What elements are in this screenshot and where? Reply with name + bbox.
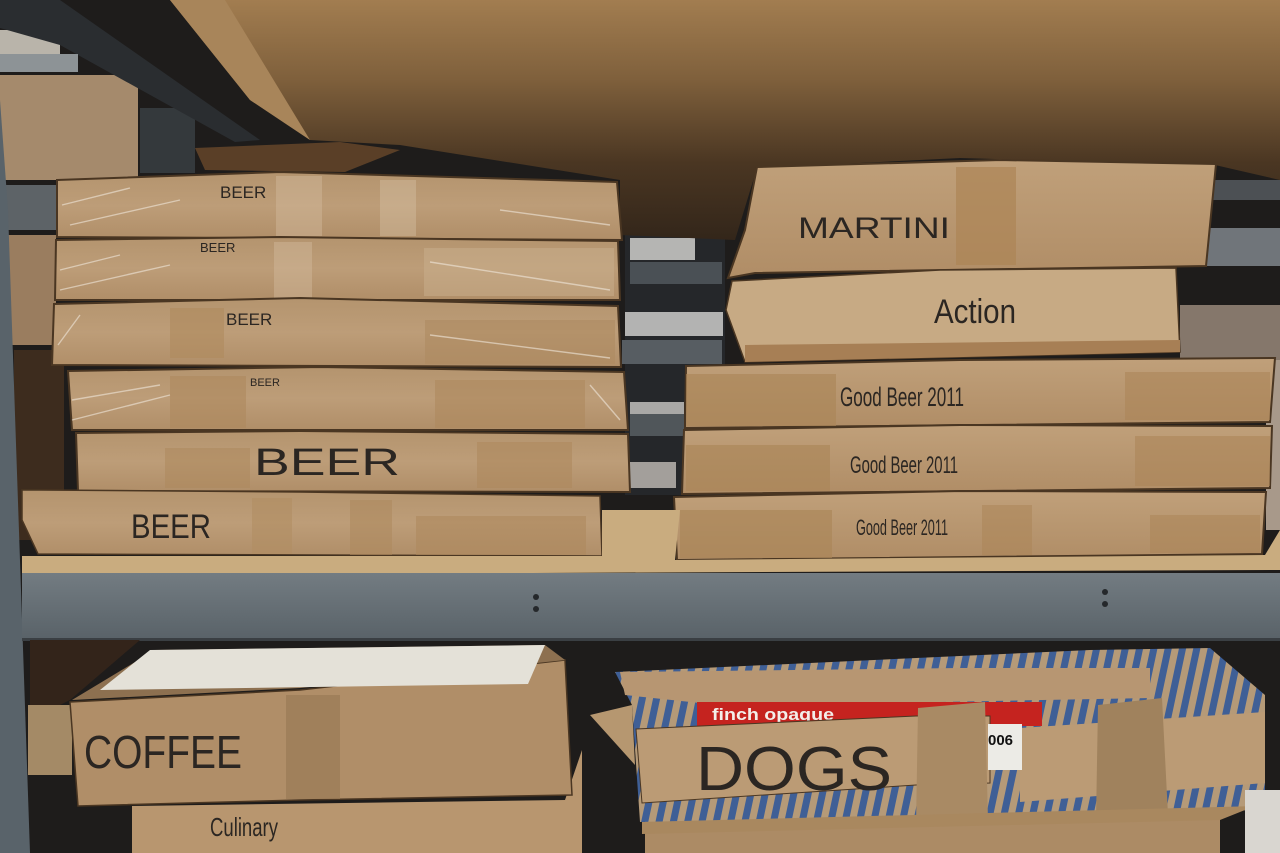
box: Culinary [132,750,582,853]
box front: DOGS [636,712,1265,804]
upper shelf frame [0,0,260,142]
corrugated offcut on top of stack [195,142,400,172]
box: Culinary: Culinary [210,812,278,842]
box: Good Beer 2011 (bottom): Good Beer 2011 [856,515,948,540]
box: BEER 4: BEER [250,377,280,389]
box: BEER 3: BEER [226,310,272,329]
box: BEER 3 [52,298,621,367]
box: Action [726,268,1180,362]
box: BEER 4 [68,367,628,430]
box: Good Beer 2011 (top) [685,358,1275,428]
box: MARTINI: MARTINI [798,212,950,245]
red label [697,702,1042,726]
left upright post [0,100,30,853]
lower shelf: coffee and culinary boxes [28,640,582,853]
right edge white carton [1245,790,1280,853]
box: BEER 5 [76,431,630,492]
box front: DOGS: DOGS [696,735,892,804]
box: MARTINI [728,160,1216,278]
stack: left boxes [22,142,630,556]
overhead cardboard sheet [170,0,1280,240]
steel shelf beam [22,573,1280,641]
stack: right boxes [674,160,1275,560]
red label: finch opaque [712,705,834,724]
box: BEER 2 [55,237,620,300]
lower shelf: dogs box [590,648,1265,853]
packing tape straps [916,702,988,826]
barcode label [988,724,1022,770]
box: COFFEE [70,645,572,806]
box: Good Beer 2011 (middle): Good Beer 2011 [850,452,958,479]
box: BEER 1 [57,172,622,240]
particle board shelf [22,510,1280,575]
box: Good Beer 2011 (middle) [682,425,1272,494]
barcode label: 006 [988,732,1013,749]
box: BEER 5: BEER [254,442,400,484]
box: BEER 2: BEER [200,240,235,255]
box: Action: Action [934,293,1016,331]
box: BEER 6: BEER [131,508,211,546]
box: Good Beer 2011 (bottom) [674,491,1266,560]
box: BEER 1: BEER [220,183,266,202]
box: Good Beer 2011 (top): Good Beer 2011 [840,382,964,412]
striped box top [615,648,1265,822]
box: BEER 6 [22,490,602,556]
box: COFFEE: COFFEE [84,726,242,778]
